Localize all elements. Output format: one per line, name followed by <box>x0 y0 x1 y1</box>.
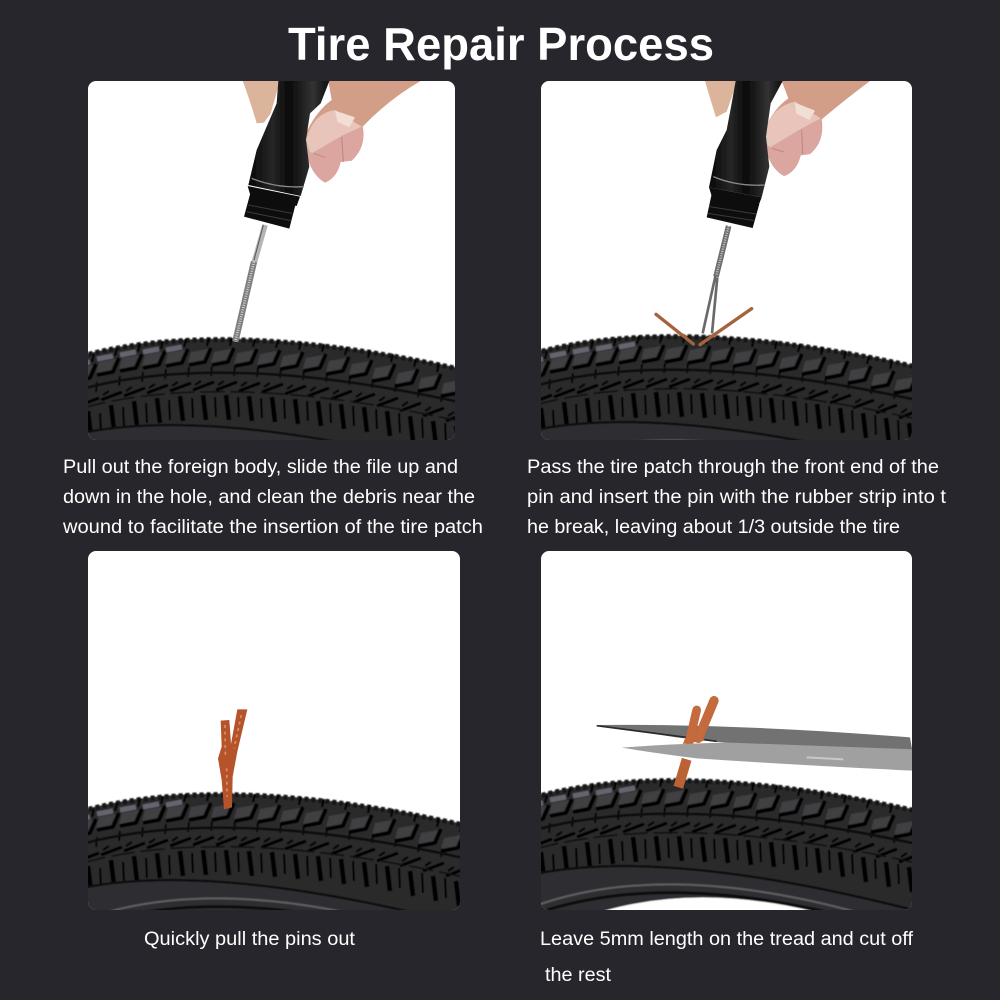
panel: step 3 pull pin out <box>88 551 460 910</box>
caption: step 2: he break, leaving about 1/3 outside the tire <box>527 517 900 538</box>
caption: step 1: wound to facilitate the insertion of the tire patch <box>62 517 483 538</box>
title: Tire Repair Process <box>288 18 714 70</box>
caption: step 2 <box>527 457 947 538</box>
caption: step 2: pin and insert the pin with the rubber strip into t <box>527 487 947 508</box>
tire tread <box>88 791 460 910</box>
icon: hand and fork tool with rubber strip <box>656 81 870 345</box>
icon: rubber strip in tire <box>218 709 247 809</box>
rubber strip <box>656 309 752 345</box>
caption: step 3: Quickly pull the pins out <box>144 929 356 950</box>
caption: step 1: down in the hole, and clean the debris near the <box>63 487 475 508</box>
caption: step 4 <box>540 929 914 986</box>
caption: step 4: Leave 5mm length on the tread and cut off <box>540 929 914 950</box>
tire tread <box>541 777 912 910</box>
icon: hand and reamer tool <box>235 81 421 342</box>
tire tread <box>541 333 912 440</box>
panel: step 4 cut off excess <box>541 551 912 910</box>
panel: step 2 insert patch <box>541 81 912 440</box>
caption: step 1: Pull out the foreign body, slide the file up and <box>63 457 458 478</box>
caption: step 4: the rest <box>545 965 612 986</box>
tire tread <box>88 336 455 440</box>
caption: step 1 <box>62 457 483 538</box>
panel: step 1 file the hole <box>88 81 455 440</box>
caption: step 2: Pass the tire patch through the front end of the <box>527 457 939 478</box>
icon: scissors and rubber strip <box>597 701 913 787</box>
